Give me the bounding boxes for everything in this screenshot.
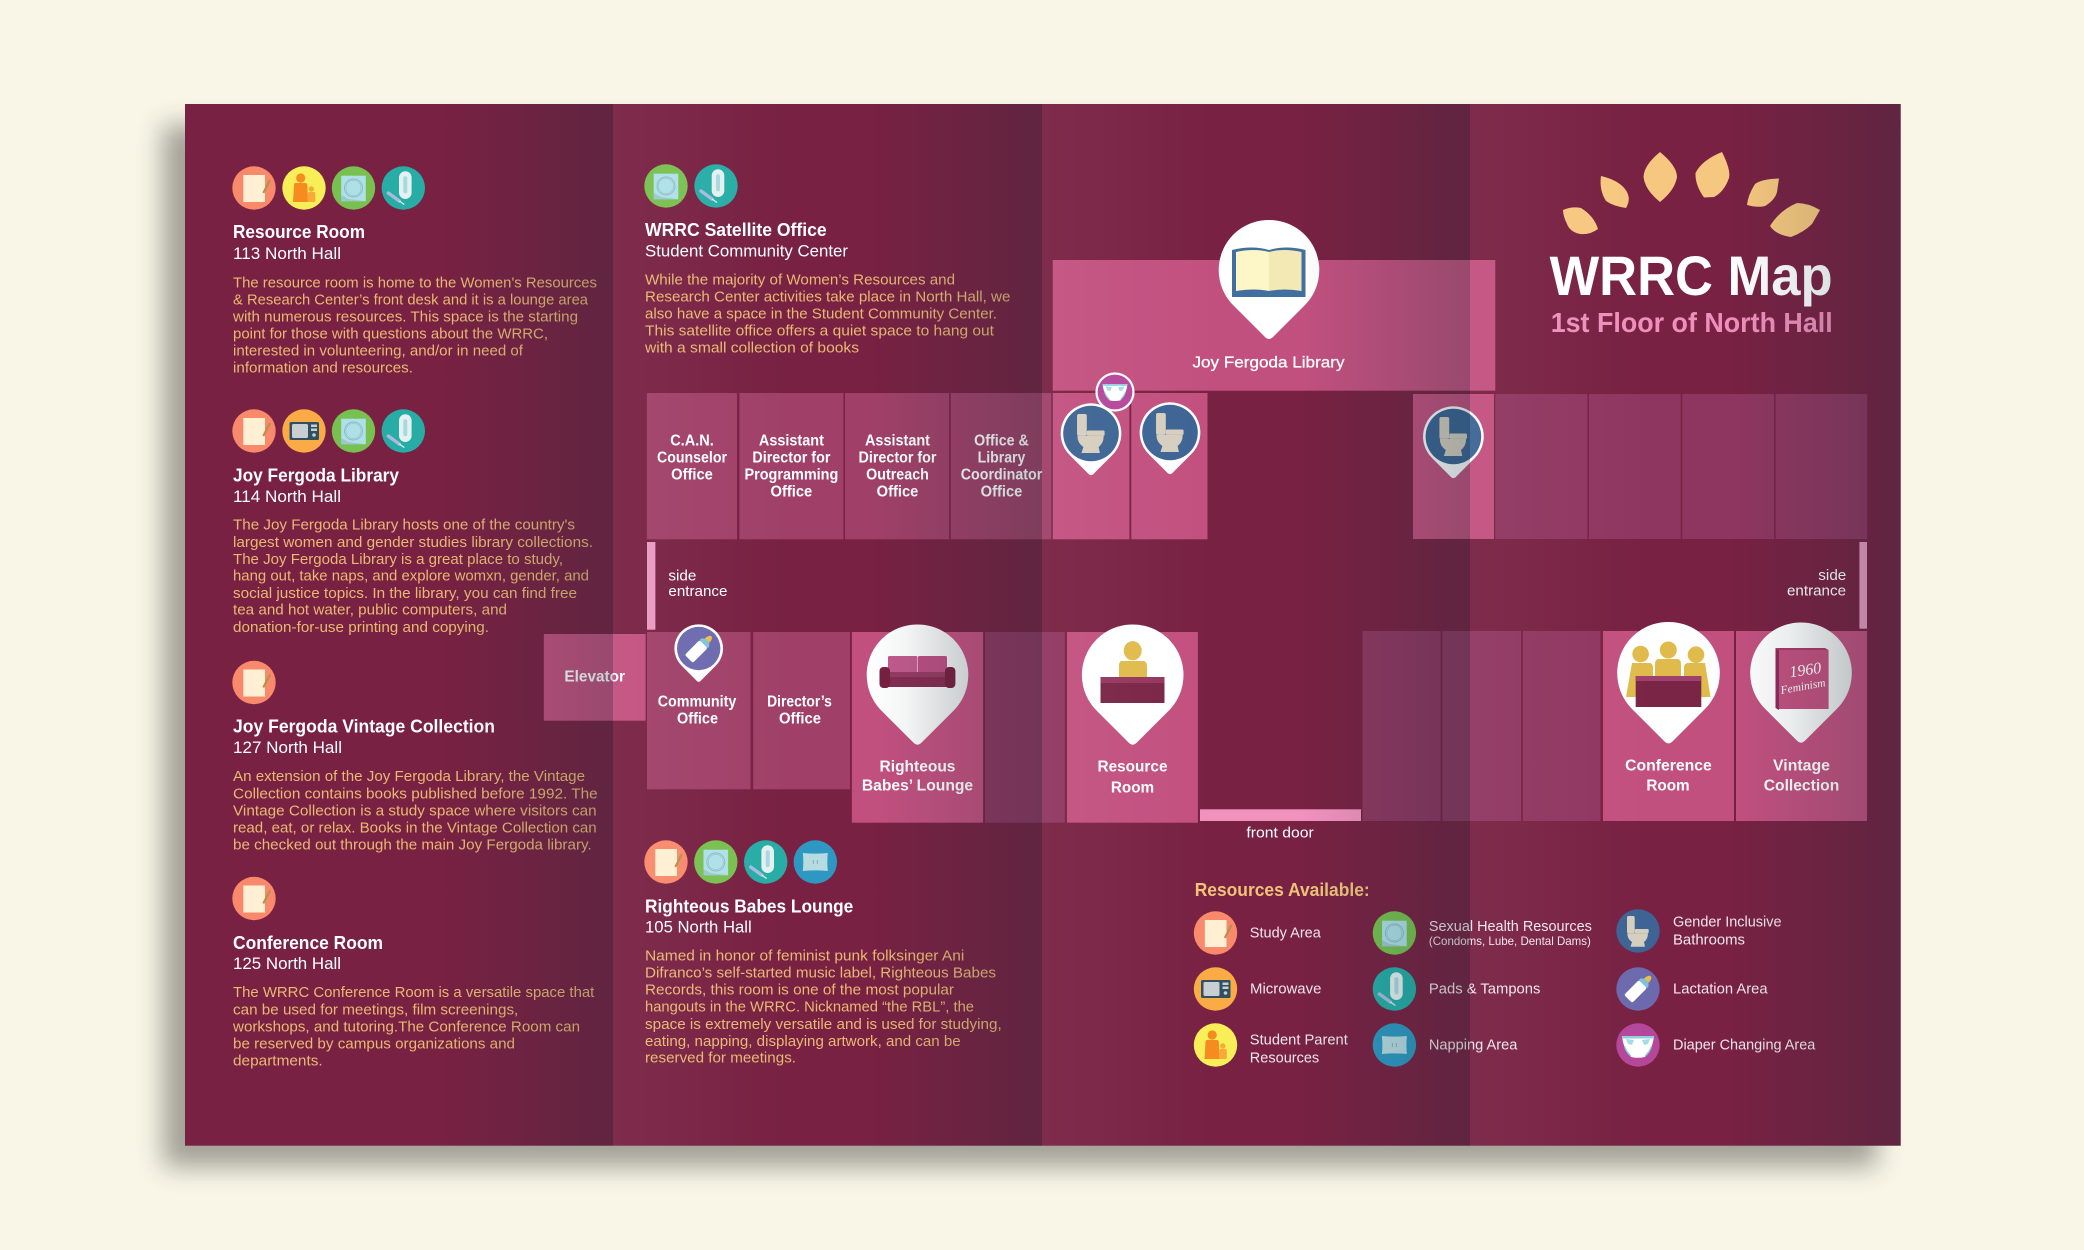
text block: library description: The Joy Fergoda Library hosts one of the country's <box>233 517 575 534</box>
legend item: napping area <box>1373 1023 1518 1067</box>
room: director's office: Office <box>779 710 821 727</box>
room: conference room <box>1603 631 1734 821</box>
floor map <box>544 220 1867 841</box>
heading: resource room: Resource Room <box>233 221 365 242</box>
room: joy fergoda library <box>1053 260 1495 391</box>
subtitle: 1st Floor of North Hall <box>1551 307 1833 338</box>
text block: conference description <box>232 984 595 1069</box>
legend item: pads and tampons <box>1373 967 1540 1011</box>
front door: front door <box>1246 824 1314 841</box>
legend item: gender inclusive bathrooms <box>1616 909 1782 953</box>
text block: library description: donation-for-use printing and copying. <box>233 619 489 636</box>
icon row: resource room <box>232 166 425 210</box>
room: community office: Office <box>677 710 718 727</box>
panel: satellite office <box>644 164 1010 357</box>
location: student community center: Student Community Center <box>645 242 848 261</box>
label: joy fergoda library: Joy Fergoda Library <box>1192 354 1345 371</box>
room: assistant director for outreach office: Outreach <box>866 467 929 484</box>
room: community office <box>647 632 750 789</box>
legend item: student parent resources: Resources <box>1250 1049 1319 1066</box>
side entrance: right: side <box>1818 567 1846 584</box>
room: office and library coordinator office: Library <box>978 450 1026 467</box>
legend item: gender inclusive bathrooms: Gender Inclusive <box>1673 914 1782 931</box>
room: c.a.n. counselor office <box>647 393 737 539</box>
text block: satellite description: This satellite office offers a quiet space to hang out <box>645 323 995 340</box>
poster background <box>185 104 1901 1146</box>
room: conference room: Conference <box>1625 757 1712 774</box>
side entrance: left <box>647 542 727 630</box>
room: c.a.n. counselor office: Counselor <box>657 450 727 467</box>
legend item: microwave <box>1194 967 1321 1011</box>
legend item: study area <box>1194 911 1321 955</box>
room: unlabelled between lounge and resource room <box>985 632 1065 823</box>
text block: vintage description: read, eat, or relax. Books in the Vintage Collection can <box>233 820 597 836</box>
text block: library description: hang out, take naps, and explore womxn, gender, and <box>233 568 589 585</box>
location: 114 north hall: 114 North Hall <box>233 487 341 506</box>
panel: conference room <box>232 877 595 1069</box>
text block: library description <box>233 517 593 636</box>
pin: sofa <box>867 624 968 745</box>
legend item: sexual health resources <box>1373 911 1592 955</box>
room: assistant director for programming office: Office <box>771 484 813 501</box>
text block: resource room description: interested in volunteering, and/or in need of <box>233 343 524 360</box>
legend item: student parent resources <box>1194 1023 1349 1067</box>
side entrance: left: entrance <box>668 583 727 600</box>
text block: conference description: be reserved by campus organizations and <box>233 1035 515 1052</box>
room: assistant director for outreach office: Director for <box>858 450 936 467</box>
legend item: lactation area <box>1616 967 1768 1011</box>
side entrance: left: side <box>668 568 696 585</box>
text block: resource room description: point for those with questions about the WRRC, <box>233 326 548 343</box>
icon row: library <box>232 409 425 453</box>
room: righteous babes' lounge <box>852 632 983 823</box>
room: conference room: Room <box>1646 778 1690 795</box>
pin: bathroom two <box>1140 402 1200 474</box>
room: vintage collection <box>1736 631 1867 821</box>
text block: conference description: The WRRC Conference Room is a versatile space that <box>233 984 595 1001</box>
room: assistant director for outreach office: Assistant <box>865 433 930 450</box>
room: director's office: Director’s <box>767 694 832 711</box>
room: assistant director for programming office: Director for <box>752 450 830 467</box>
room: righteous babes' lounge: Babes’ Lounge <box>862 777 974 794</box>
pin: person at desk <box>1082 624 1184 745</box>
location: 105 north hall: 105 North Hall <box>645 917 752 936</box>
room: resource room: Resource <box>1098 759 1168 776</box>
legend item: napping area: Napping Area <box>1429 1036 1518 1053</box>
room: office and library coordinator office: Office <box>981 484 1023 501</box>
pin: vintage book: 1960 <box>1788 660 1822 681</box>
panel: resource room <box>232 166 597 376</box>
legend item: lactation area: Lactation Area <box>1673 980 1768 997</box>
text block: satellite description: Research Center activities take place in North Hall, we <box>645 288 1010 305</box>
text block: vintage description: Vintage Collection is a study space where visitors can <box>233 803 597 820</box>
room: director's office <box>753 632 850 789</box>
title: WRRC Map <box>1550 244 1833 307</box>
location: 125 north hall: 125 North Hall <box>233 954 341 973</box>
text block: vintage description: Collection contains books published before 1992. The <box>233 785 598 802</box>
text block: lounge description: reserved for meetings. <box>645 1050 796 1067</box>
text block: library description: largest women and gender studies library collections. <box>233 534 593 551</box>
text block: satellite description: also have a space in the Student Community Center. <box>645 306 997 323</box>
text block: conference description: departments. <box>233 1052 323 1069</box>
text block: vintage description <box>233 768 598 854</box>
room: assistant director for programming office: Assistant <box>759 433 824 450</box>
room: resource room: Room <box>1111 779 1154 796</box>
legend item: microwave: Microwave <box>1250 980 1321 997</box>
pin: bathroom one <box>1061 403 1121 475</box>
legend item: sexual health resources: (Condoms, Lube, Dental Dams) <box>1429 934 1591 948</box>
pin: bathroom three <box>1423 406 1484 478</box>
room: elevator: Elevator <box>564 669 625 686</box>
text block: resource room description: & Research Center’s front desk and it is a lounge area <box>233 292 589 309</box>
panel: joy fergoda library <box>232 409 593 636</box>
pin: diaper changing <box>1095 372 1135 412</box>
heading: vintage collection: Joy Fergoda Vintage Collection <box>233 715 495 736</box>
room: assistant director for outreach office: Office <box>877 484 919 501</box>
panel: righteous babes lounge <box>644 840 1002 1067</box>
text block: vintage description: be checked out through the main Joy Fergoda library. <box>233 837 592 854</box>
text block: lounge description: hangouts in the WRRC. Nicknamed “the RBL”, the <box>645 999 974 1016</box>
panel: vintage collection <box>232 661 598 854</box>
room: elevator <box>544 634 646 721</box>
text block: resource room description <box>232 274 597 376</box>
text block: conference description: workshops, and tutoring.The Conference Room can <box>232 1018 580 1036</box>
text block: lounge description: Records, this room is one of the most popular <box>645 982 954 999</box>
room: office and library coordinator office <box>951 393 1051 539</box>
text block: lounge description <box>645 948 1002 1067</box>
text block: satellite description: with a small collection of books <box>644 340 859 357</box>
room: resource room <box>1067 632 1198 823</box>
room: office and library coordinator office: Coordinator <box>961 467 1042 484</box>
pin: vintage book: Feminism <box>1779 677 1826 697</box>
legend item: diaper changing area: Diaper Changing Area <box>1673 1036 1816 1053</box>
text block: library description: The Joy Fergoda Library is a great place to study, <box>233 551 563 568</box>
room: assistant director for programming office <box>739 393 844 539</box>
room: assistant director for programming office: Programming <box>744 467 838 484</box>
room: righteous babes' lounge: Righteous <box>880 759 955 776</box>
text block: lounge description: Named in honor of feminist punk folksinger Ani <box>645 948 964 965</box>
location: 127 north hall: 127 North Hall <box>233 738 342 757</box>
legend item: study area: Study Area <box>1250 925 1321 942</box>
room: office and library coordinator office: Office & <box>974 433 1029 450</box>
icon: study area <box>232 661 276 704</box>
text block: library description: social justice topics. In the library, you can find free <box>233 585 577 602</box>
heading: righteous babes lounge: Righteous Babes Lounge <box>645 895 853 916</box>
room: bathrooms <box>1053 393 1494 539</box>
location: 113 north hall: 113 North Hall <box>233 244 341 263</box>
text block: lounge description: space is extremely versatile and is used for studying, <box>645 1016 1002 1033</box>
text block: library description: tea and hot water, public computers, and <box>233 602 507 619</box>
pin: conference group <box>1617 622 1720 743</box>
room: community office: Community <box>658 694 737 711</box>
heading: joy fergoda library: Joy Fergoda Library <box>233 464 400 485</box>
pin: lactation bottle <box>674 624 723 682</box>
text block: vintage description: An extension of the Joy Fergoda Library, the Vintage <box>233 768 585 785</box>
heading: conference room: Conference Room <box>233 932 383 953</box>
text block: conference description: can be used for meetings, film screenings, <box>233 1001 518 1018</box>
text block: lounge description: eating, napping, displaying artwork, and can be <box>645 1033 961 1050</box>
fold shading overlay <box>185 104 1901 1146</box>
pin: vintage book <box>1750 622 1852 743</box>
legend item: student parent resources: Student Parent <box>1250 1031 1349 1048</box>
text block: resource room description: information and resources. <box>233 360 413 376</box>
side entrance: right <box>1787 542 1867 629</box>
side entrance: right: entrance <box>1787 583 1846 600</box>
icon: study area <box>232 877 276 920</box>
text block: resource room description: The resource room is home to the Women's Resources <box>233 274 597 292</box>
text block: resource room description: with numerous resources. This space is the starting <box>232 308 578 325</box>
rooms: lower right unlabelled <box>1362 631 1600 821</box>
text block: satellite description: While the majority of Women’s Resources and <box>645 271 955 288</box>
text block: lounge description: Difranco’s self-started music label, Righteous Babes <box>645 965 996 982</box>
room: c.a.n. counselor office: Office <box>671 467 713 484</box>
rooms: upper right unlabelled <box>1495 394 1867 539</box>
legend item: sexual health resources: Sexual Health Resources <box>1429 918 1592 935</box>
icon row: lounge <box>644 840 837 884</box>
room: vintage collection: Collection <box>1764 778 1839 795</box>
heading: wrrc satellite office: WRRC Satellite Office <box>645 219 827 240</box>
icon row: satellite office <box>644 164 738 208</box>
room: c.a.n. counselor office: C.A.N. <box>670 433 714 450</box>
legend item: diaper changing area <box>1616 1023 1816 1067</box>
room: vintage collection: Vintage <box>1773 757 1830 774</box>
text block: satellite description <box>644 271 1010 357</box>
logo: leaves <box>1563 152 1820 237</box>
drop shadow <box>163 125 1877 1167</box>
legend: resources available <box>1194 880 1816 1067</box>
front door <box>1200 809 1361 841</box>
room: assistant director for outreach office <box>845 393 949 539</box>
legend heading: Resources Available: <box>1195 880 1370 900</box>
legend item: pads and tampons: Pads & Tampons <box>1429 980 1540 997</box>
legend item: gender inclusive bathrooms: Bathrooms <box>1673 932 1745 949</box>
pin: library book <box>1219 220 1319 339</box>
